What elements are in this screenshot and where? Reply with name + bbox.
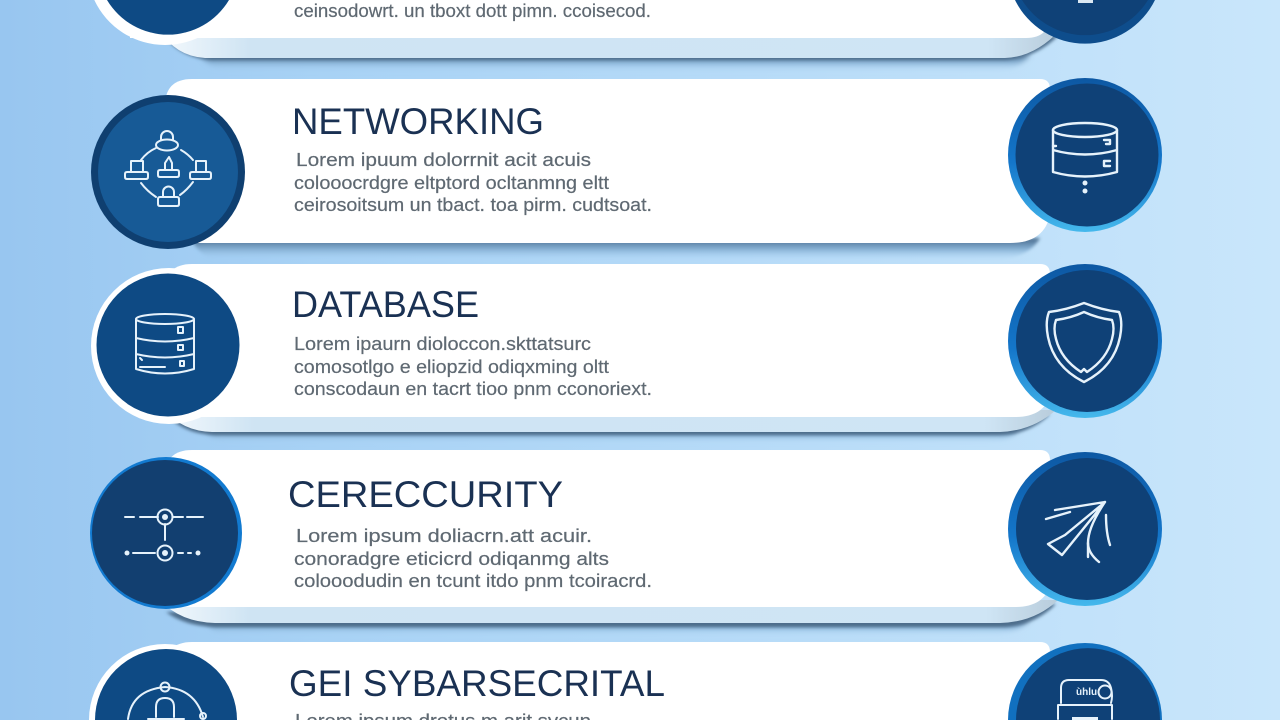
icon: paper plane sketch: [1008, 452, 1162, 606]
panel: top card (cropped): [94, 0, 1155, 70]
panel: cerecurity: [90, 450, 1162, 634]
text: database body: [294, 334, 652, 399]
text: top card body: ceinsodowrt. un tboxt dott pimn. ccoisecod.: [294, 1, 651, 21]
text: networking body: colooocrdgre eltptord ocltanmng eltt: [294, 173, 609, 193]
icon: top left circle: [94, 0, 236, 45]
icon: database cylinder: [91, 268, 247, 424]
text: database body: conscodaun en tacrt tioo pnm cconoriext.: [294, 379, 652, 399]
icon: connector nodes: [90, 457, 242, 609]
heading: networking: NETWORKING: [292, 101, 544, 142]
panel: gei sybarsecrital: [89, 642, 1162, 720]
text: networking body: [294, 150, 652, 215]
text: cerecurity body: Lorem ipsum doliacrn.att acuir.: [296, 526, 592, 546]
heading: gei sybarsecrital: GEI SYBARSECRITAL: [289, 663, 665, 704]
icon: server stack: [1008, 78, 1162, 232]
panel: database: [91, 264, 1162, 441]
icon: network lock: [89, 644, 241, 720]
icon: device: [1008, 643, 1162, 720]
heading: cerecurity: CERECCURITY: [288, 474, 563, 515]
icon: top right circle: [1015, 0, 1155, 44]
text: database body: comosotlgo e eliopzid odiqxming oltt: [294, 357, 609, 377]
panel: networking: [91, 78, 1162, 260]
text: cerecurity body: conoradgre eticicrd odiqanmg alts: [294, 549, 609, 569]
icon: shield: [1008, 264, 1162, 418]
heading: database: DATABASE: [292, 284, 479, 325]
text: networking body: Lorem ipuum dolorrnit acit acuis: [296, 150, 591, 170]
text: cerecurity body: colooodudin en tcunt itdo pnm tcoiracrd.: [294, 571, 652, 591]
icon: networking people: [91, 95, 245, 249]
text: database body: Lorem ipaurn dioloccon.skttatsurc: [294, 334, 591, 354]
text: cerecurity body: [294, 526, 652, 591]
text: networking body: ceirosoitsum un tbact. toa pirm. cudtsoat.: [294, 195, 652, 215]
icon: device: ùhlu: [1076, 687, 1097, 698]
